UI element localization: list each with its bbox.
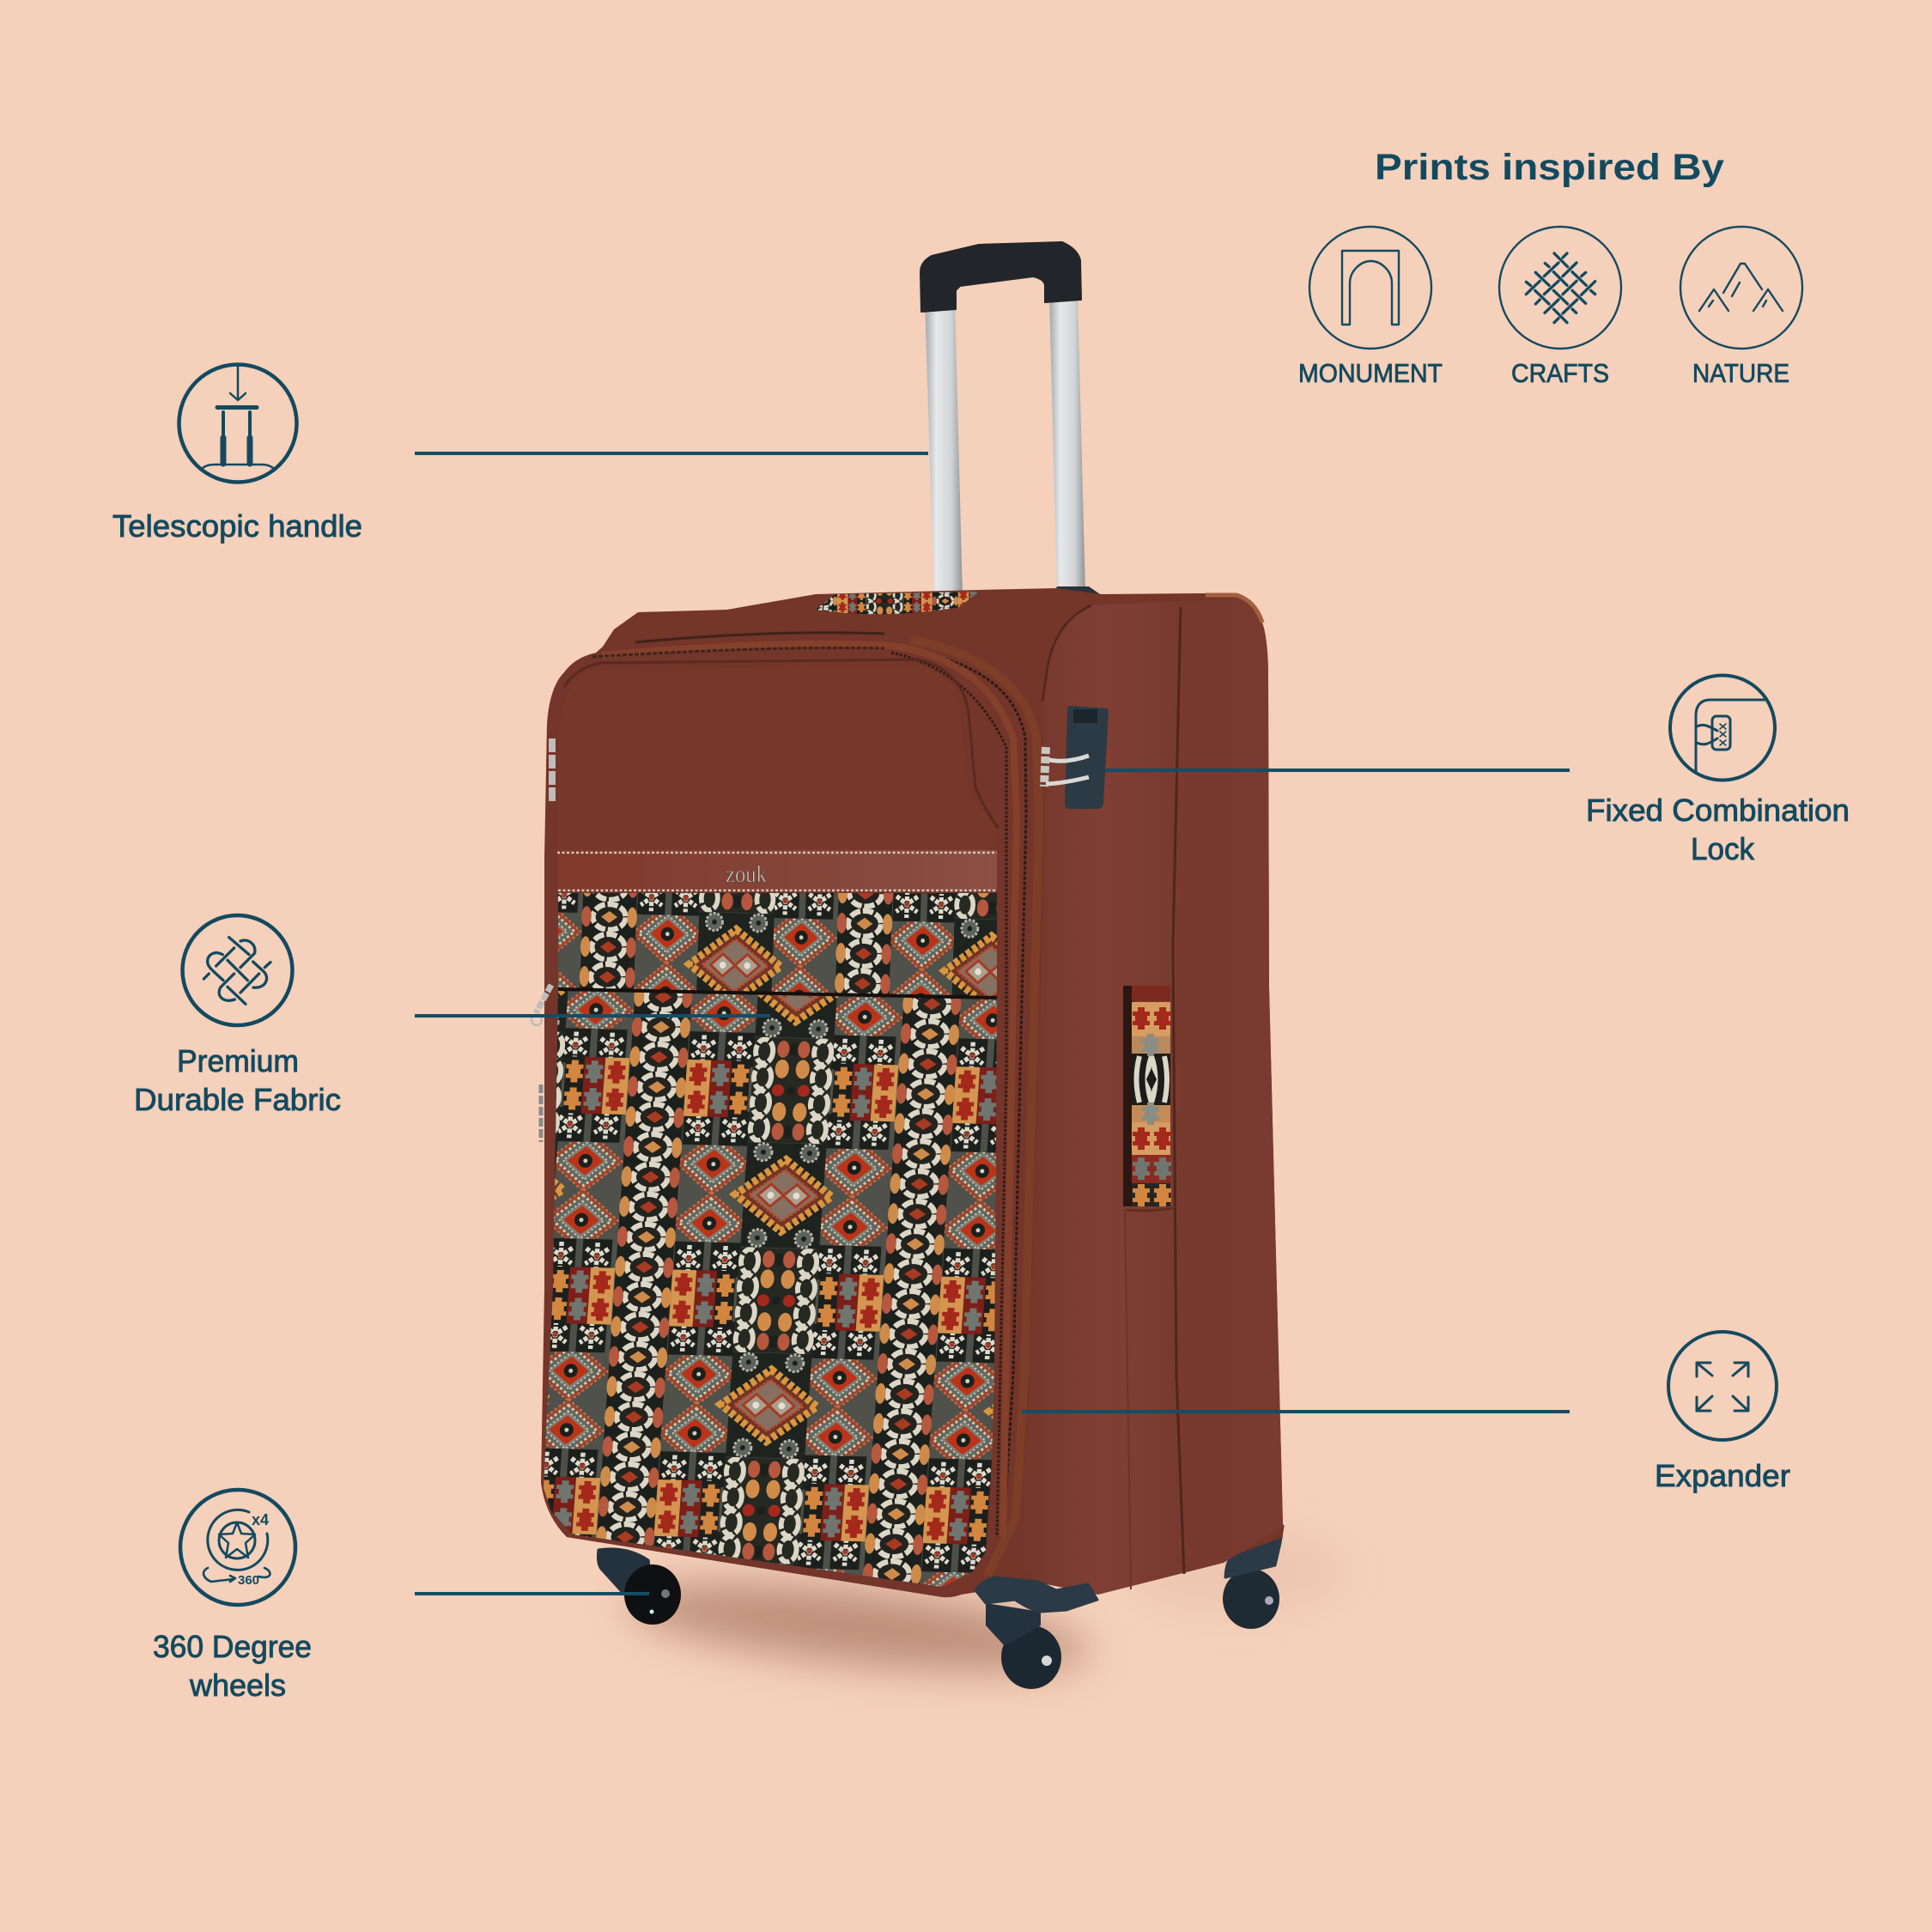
side carry handle print: [1123, 986, 1171, 1206]
crafts: [1499, 227, 1621, 388]
label: 360 degree wheels: [153, 1629, 312, 1703]
icon: lock: [1670, 675, 1775, 780]
label: 360 degree wheels: 360 Degree: [153, 1629, 312, 1664]
upper front pocket: [557, 665, 996, 850]
feature: 360 degree wheels: [153, 1490, 312, 1703]
heading: Prints inspired By: [1375, 147, 1724, 188]
panel: prints inspired by: [1298, 147, 1802, 388]
top print handle: [816, 592, 979, 615]
telescopic handle: [920, 242, 1103, 597]
front left wheel: [598, 1549, 681, 1625]
label: expander: Expander: [1655, 1458, 1790, 1493]
label: premium durable fabric: [134, 1043, 341, 1117]
brand logo: zouk: [726, 861, 767, 887]
leather band: [557, 850, 997, 891]
suitcase: [531, 241, 1285, 1689]
feature: premium durable fabric: [134, 915, 341, 1117]
label: nature: NATURE: [1692, 358, 1789, 388]
front right swivel wheel: [975, 1577, 1097, 1689]
icon: woven fabric: [182, 915, 292, 1025]
zipper pulls: [532, 738, 552, 1142]
pointer: lock: [1105, 769, 1570, 772]
pointer: wheels: [415, 1592, 649, 1595]
pointer: expander: [1022, 1410, 1570, 1413]
patterned panel lower: [544, 991, 997, 1587]
label: 360 degree wheels: wheels: [189, 1668, 286, 1703]
label: fixed combination lock: [1586, 793, 1850, 866]
icon: mountains: [1680, 227, 1802, 349]
label: premium durable fabric: Durable Fabric: [134, 1082, 341, 1117]
side seams: [1042, 595, 1262, 1589]
patterned panel upper: [558, 893, 997, 996]
icon: wheel: [180, 1490, 295, 1605]
icon: monument arch: [1309, 227, 1431, 349]
feature: telescopic handle: [112, 364, 362, 544]
icon: telescopic handle: [179, 364, 297, 483]
rear right wheel: [1223, 1526, 1283, 1629]
icon: wheel: 360: [238, 1573, 259, 1588]
label: monument: MONUMENT: [1298, 358, 1443, 388]
side panel: [1005, 598, 1283, 1595]
label: telescopic handle: Telescopic handle: [112, 508, 362, 544]
icon: crafts weave: [1499, 227, 1621, 349]
icon: expander arrows: [1668, 1332, 1777, 1440]
icon: wheel: x4: [252, 1511, 269, 1528]
front shell: [541, 633, 1046, 1597]
label: fixed combination lock: Lock: [1691, 831, 1755, 866]
feature: expander: [1655, 1332, 1790, 1493]
pocket zipper: [558, 989, 997, 998]
feature: fixed combination lock: [1586, 675, 1850, 866]
label: premium durable fabric: Premium: [177, 1043, 299, 1078]
pointer: fabric: [415, 1014, 770, 1018]
monument: [1298, 227, 1443, 388]
combination lock: [1044, 706, 1109, 809]
floor shadow: [624, 1528, 1348, 1687]
main body silhouette: [558, 588, 1283, 1597]
label: crafts: CRAFTS: [1511, 358, 1609, 388]
pointer: telescopic handle: [415, 452, 928, 455]
nature: [1680, 227, 1802, 388]
label: fixed combination lock: Fixed Combination: [1586, 793, 1850, 828]
zipper bands: [592, 633, 1039, 1576]
